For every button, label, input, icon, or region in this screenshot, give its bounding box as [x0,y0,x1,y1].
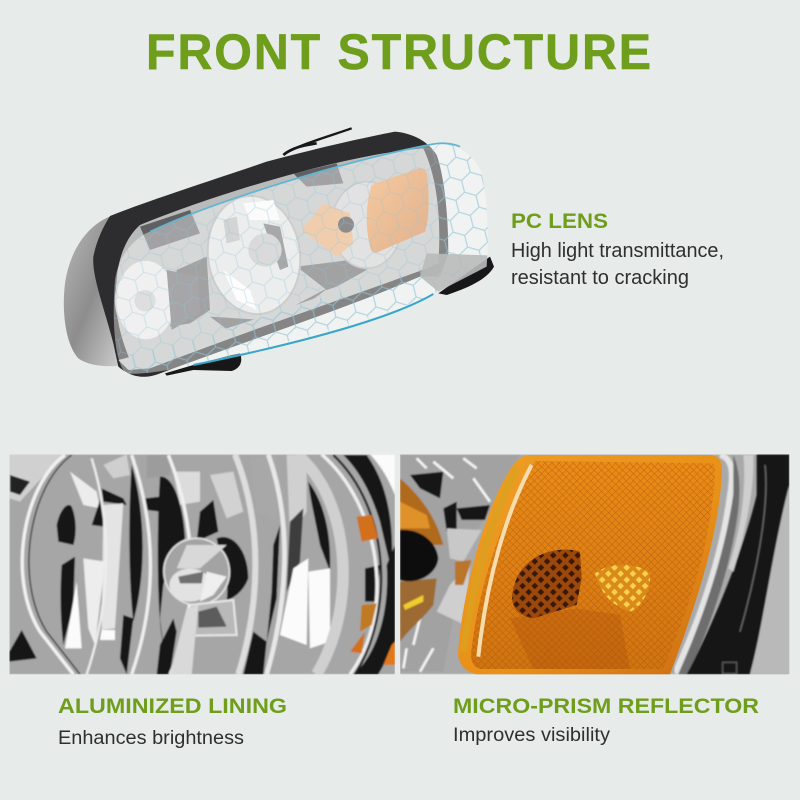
amber marker lens [458,455,722,674]
lens mounting tab [420,253,487,292]
headlight with PC lens overlay [64,128,494,377]
white highlights [65,454,395,648]
headlight: lower trim [118,260,432,370]
heading: micro-prism reflector: MICRO-PRISM REFLECTOR [453,695,759,718]
PC lens overlay [110,140,490,377]
upper background light patches [9,454,63,502]
headlight: amber side marker [367,168,429,253]
text: PC lens description [511,240,724,289]
grey outer background [750,485,789,674]
headlight: bulb and amber reflection [302,182,402,268]
headlight: grey outer bezel [64,217,125,366]
dark bulb [400,530,438,581]
heading: PC lens: PC LENS [511,210,608,233]
headlight: small low beam lens [116,260,200,340]
text: PC lens description: resistant to cracking [511,267,689,289]
panel: micro-prism reflector photo [400,454,789,674]
centre projector bulb [159,533,237,674]
text: aluminized lining description: Enhances brightness [58,728,244,749]
chrome facets background [400,457,492,673]
amber reflections [350,515,395,665]
panel: aluminized lining photo [9,454,395,674]
chrome trim [675,455,732,673]
black housing edge [687,454,789,674]
text: micro-prism reflector description: Improves visibility [453,725,611,746]
headlight: inner chrome body [116,148,439,360]
text: PC lens description: High light transmittance, [511,240,724,262]
headlight: black housing [93,132,448,377]
title: FRONT STRUCTURE [146,24,653,80]
heading: aluminized lining: ALUMINIZED LINING [58,695,287,718]
headlight: black mounting clips [165,128,494,376]
chrome reflector rings [22,454,381,674]
headlight: large reflector [200,190,308,320]
dark reflections [9,455,395,674]
